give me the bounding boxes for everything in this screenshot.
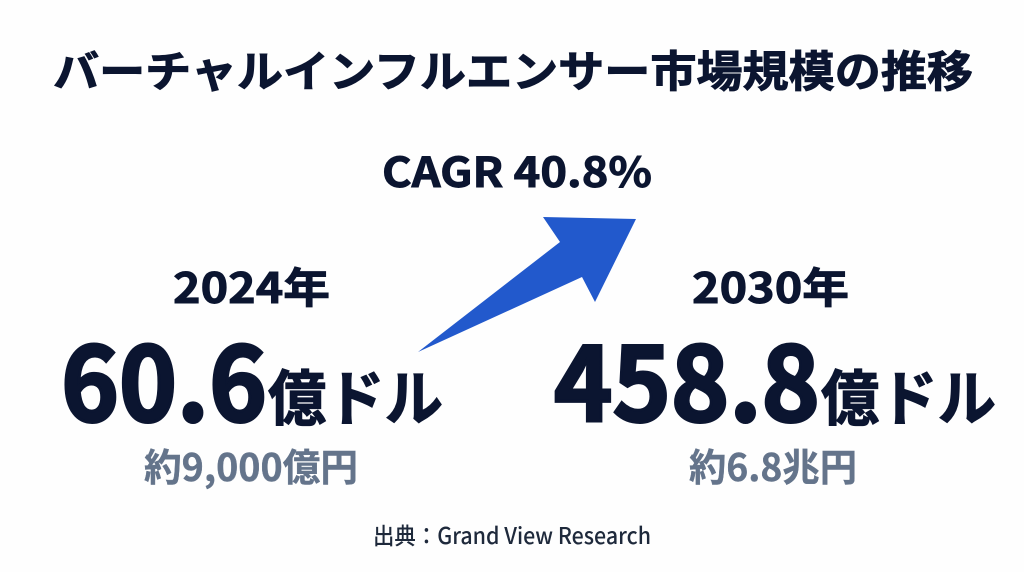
title: バーチャルインフルエンサー市場規模の推移 xyxy=(53,38,973,100)
value 458.8 billion dollars: 億ドル xyxy=(821,351,996,438)
source note: 出典：Grand View Research xyxy=(373,517,651,551)
value 458.8 billion dollars: 458.8 xyxy=(554,304,820,451)
panel: 2024 xyxy=(61,255,443,492)
arrow: growth xyxy=(418,217,636,352)
yen equivalent: 約9,000億円 xyxy=(144,437,358,492)
value 60.6 billion dollars: 億ドル xyxy=(268,351,443,438)
year label 2024: 2024年 xyxy=(173,255,330,316)
year label 2030: 2030年 xyxy=(692,255,849,316)
value 60.6 billion dollars xyxy=(61,304,443,451)
CAGR label: CAGR 40.8% xyxy=(382,139,652,199)
value 60.6 billion dollars: 60.6 xyxy=(61,304,267,451)
panel: 2030 xyxy=(554,255,996,492)
yen equivalent: 約6.8兆円 xyxy=(689,437,857,492)
value 458.8 billion dollars xyxy=(554,304,996,451)
